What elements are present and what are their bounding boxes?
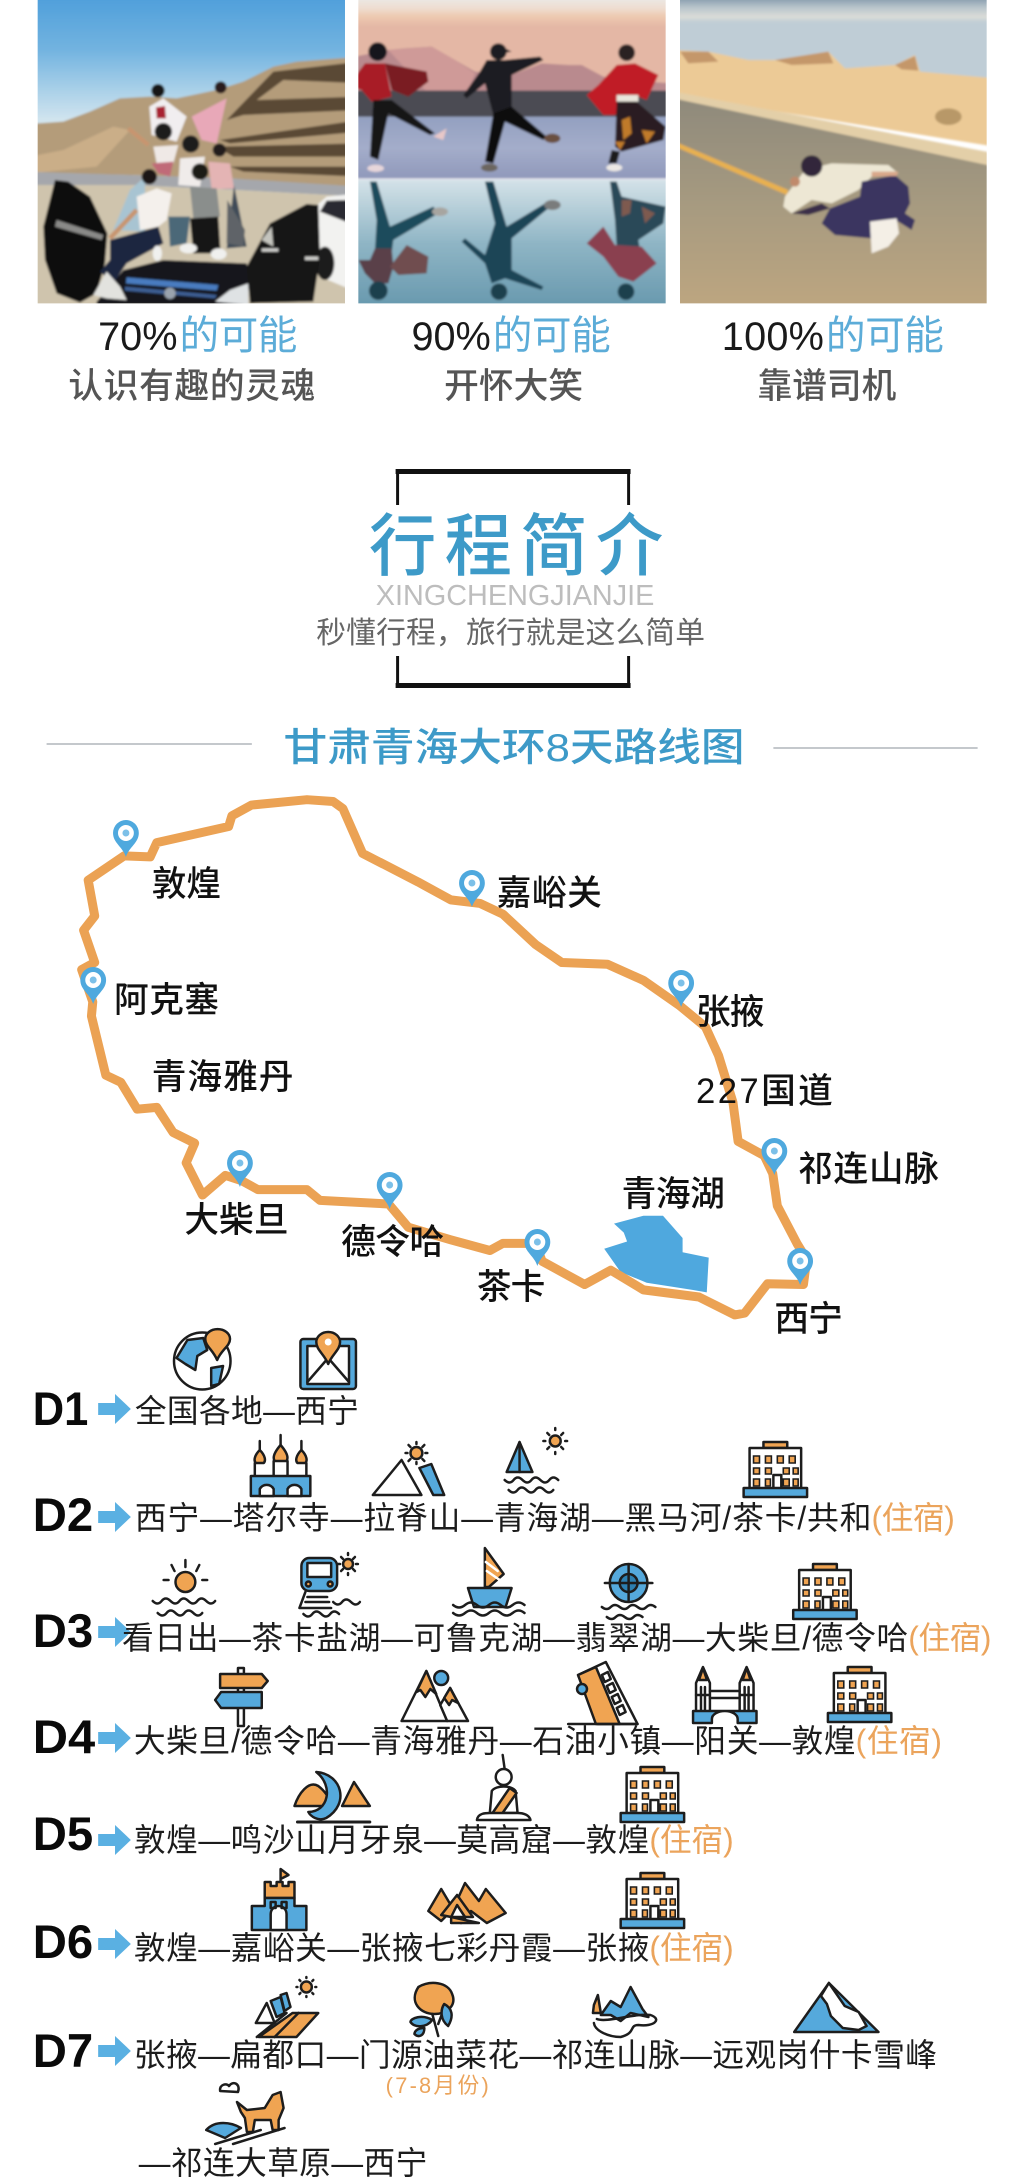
place labels: 青海雅丹 [152,1058,293,1097]
route text: 敦煌—嘉峪关—张掖七彩丹霞—张掖 [134,1930,649,1966]
icon: Qilian mountains and river [593,1987,656,2037]
icon: gate bridge [693,1667,757,1723]
place labels: 茶卡 [477,1268,545,1307]
icon: mountain with sun [373,1442,444,1495]
icon: hotel [621,1767,684,1822]
icon: sunrise over water [153,1560,215,1616]
flower season note: (7-8月份) [386,2073,489,2098]
lodging tag: (住宿) [908,1620,991,1656]
icon: Buddha statue [477,1755,530,1820]
route text: 敦煌—鸣沙山月牙泉—莫高窟—敦煌 [134,1822,649,1858]
icon: yardang mountains [402,1671,468,1721]
orange route line [82,800,807,1315]
icon: castle with flag [252,1869,306,1930]
arrow [98,1929,131,1959]
photo: jumping on salt lake [355,0,672,307]
arrow [98,1502,131,1532]
caption: 70% [68,314,315,406]
caption: 100%: 靠谱司机 [758,367,896,406]
caption: 100% [722,314,944,406]
place labels: 德令哈 [341,1223,444,1262]
arrow [98,1617,131,1647]
lodging tag: (住宿) [856,1723,942,1759]
caption: 70%: 70% [98,315,177,359]
heading frame [398,471,629,686]
place labels: 大柴旦 [184,1201,289,1240]
place labels: 西宁 [774,1300,843,1339]
day 1 row [33,1329,359,1435]
day 2 row [33,1428,955,1541]
lake: Qinghai Lake [604,1216,709,1292]
day label: D5 [33,1808,93,1860]
photo: person lying on desert road [675,0,995,307]
day label: D2 [33,1489,93,1541]
icon: emerald lake wheel [602,1564,655,1619]
route text: 西宁—塔尔寺—拉脊山—青海湖—黑马河/茶卡/共和 [135,1500,872,1536]
icon: hotel [621,1873,684,1928]
icon: sailboat with sun [505,1428,567,1492]
photo: group with car [30,0,360,307]
route text: 全国各地—西宁 [135,1393,359,1429]
route map [80,800,939,1339]
icon: sailing boat on waves [453,1548,525,1616]
place labels [114,865,939,1339]
caption: 90%: 的可能 [493,314,611,358]
lodging tag: (住宿) [649,1822,734,1858]
day label: D4 [33,1711,95,1763]
route map title: 甘肃青海大环8天路线图 [284,727,745,770]
caption: 70%: 认识有趣的灵魂 [68,367,315,406]
route text: 张掖—扁都口—门源油菜花—祁连山脉—远观岗什卡雪峰 [134,2037,937,2073]
section heading: itinerary overview [316,469,705,688]
heading pinyin: XINGCHENGJIANJIE [376,580,654,612]
heading tagline: 秒懂行程，旅行就是这么简单 [316,617,705,650]
route text, second line: —祁连大草原—西宁 [139,2145,427,2181]
icon: temple [251,1435,310,1496]
icon: snow peak [794,1983,878,2032]
route text: 看日出—茶卡盐湖—可鲁克湖—翡翠湖—大柴旦/德令哈 [122,1620,908,1656]
icon: tilted bus [568,1662,638,1724]
day 4 row [33,1662,942,1763]
arrow [98,1723,131,1753]
icon: mountain pass road [256,1977,318,2037]
place labels: 敦煌 [152,865,221,904]
icon: horse on grassland [206,2083,285,2144]
day 6 row [33,1869,734,1968]
icon: crescent moon and dunes [294,1772,370,1822]
caption: 90%: 开怀大笑 [444,367,583,406]
arrow [98,2036,131,2066]
icon: rainbow mountains [428,1883,506,1923]
day label: D3 [33,1605,93,1657]
day 5 row [33,1755,734,1860]
day label: D1 [33,1383,88,1435]
day label: D6 [33,1916,93,1968]
route text: 大柴旦/德令哈—青海雅丹—石油小镇—阳关—敦煌 [134,1723,856,1759]
caption: 90% [411,314,611,406]
icon: globe with pin [174,1329,231,1390]
icon: rapeseed flower [410,1983,453,2036]
arrow [98,1825,131,1855]
pins [80,820,813,1285]
caption: 90%: 90% [411,315,491,359]
heading title: 行程简介 [369,510,663,585]
caption: 70%: 的可能 [179,314,297,358]
day 7 row [33,1977,937,2181]
place labels: 张掖 [696,993,764,1032]
arrow [98,1394,131,1424]
day label: D7 [33,2025,93,2077]
place labels: 祁连山脉 [798,1150,939,1189]
place labels: 青海湖 [622,1175,725,1214]
icon: signpost [215,1668,268,1726]
caption: 100%: 的可能 [826,314,944,358]
icon: hotel [744,1442,807,1497]
icon: hotel [828,1667,891,1722]
icon: train [299,1553,360,1616]
caption: 100%: 100% [722,315,824,359]
day 3 row [33,1548,991,1657]
place labels: 227国道 [696,1072,833,1111]
place labels: 阿克塞 [114,981,219,1020]
icon: map with pin [300,1332,356,1389]
lodging tag: (住宿) [872,1500,955,1536]
place labels: 嘉峪关 [497,874,602,913]
icon: hotel [793,1564,857,1619]
lodging tag: (住宿) [649,1930,734,1966]
